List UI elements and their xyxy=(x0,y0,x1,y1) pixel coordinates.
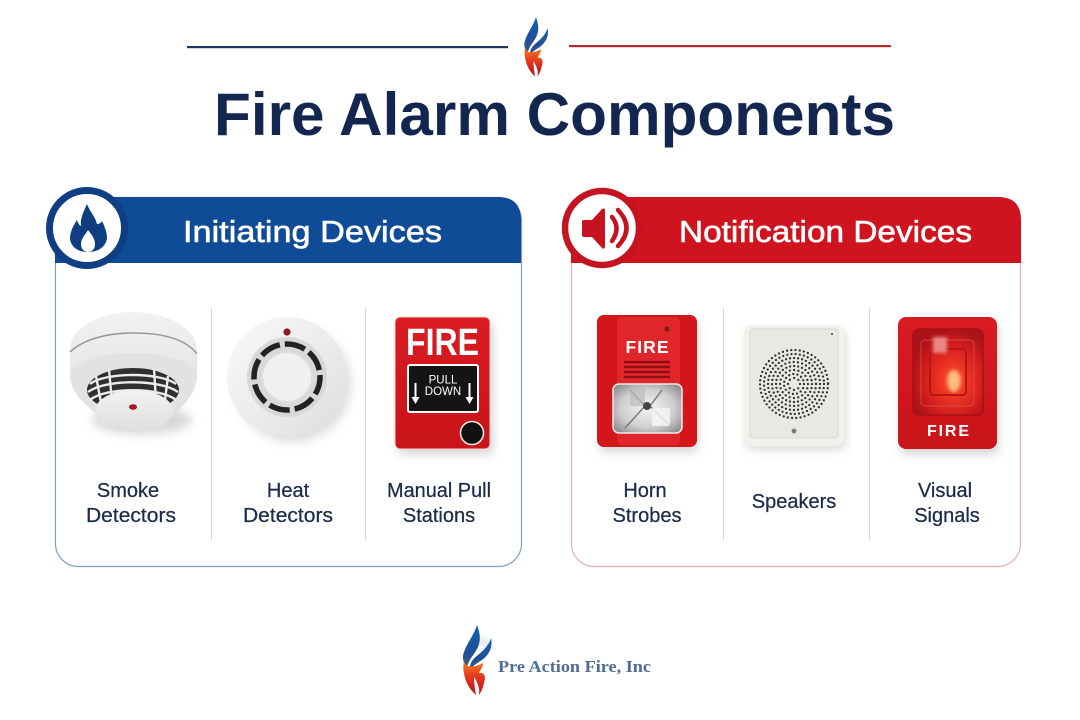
label: horn strobes xyxy=(613,480,681,527)
divider xyxy=(869,308,870,540)
label: manual pull stations: Manual Pull xyxy=(387,480,491,502)
label: manual pull stations: Stations xyxy=(403,505,475,527)
label: heat detectors: Heat xyxy=(267,480,310,502)
footer logo xyxy=(463,615,651,695)
company name: Pre Action Fire, Inc xyxy=(498,657,651,676)
device: horn strobe xyxy=(597,315,697,452)
heading: notification devices: Notification Devices xyxy=(679,214,972,249)
icon: flame badge xyxy=(50,190,124,266)
label: smoke detectors xyxy=(86,480,176,527)
panel header xyxy=(55,197,521,263)
panel: notification devices xyxy=(565,191,1021,566)
device: speaker xyxy=(744,325,845,449)
device: smoke detector xyxy=(70,312,197,434)
icon: speaker badge xyxy=(565,191,639,265)
device: manual pull station xyxy=(395,317,493,454)
label: visual signals: Visual xyxy=(918,480,972,502)
device: horn strobe: FIRE xyxy=(626,337,668,357)
divider xyxy=(365,308,366,540)
icon: footer smoke wisp xyxy=(465,615,494,650)
label: smoke detectors: Smoke xyxy=(97,480,159,502)
device: heat detector xyxy=(227,317,351,442)
device: manual pull station: DOWN xyxy=(425,386,461,398)
divider xyxy=(723,308,724,540)
device: manual pull station: FIRE xyxy=(406,322,479,364)
label: speakers: Speakers xyxy=(752,491,836,513)
device: visual signal xyxy=(898,317,998,454)
label: horn strobes: Horn xyxy=(623,480,667,502)
title: Fire Alarm Components xyxy=(214,81,895,148)
label: horn strobes: Strobes xyxy=(613,505,681,527)
icon: footer flame xyxy=(463,625,492,695)
panel: initiating devices xyxy=(50,190,522,566)
top divider: red line xyxy=(569,45,891,47)
label: visual signals xyxy=(914,480,980,527)
divider xyxy=(211,308,212,540)
panel outline xyxy=(56,198,522,566)
label: smoke detectors: Detectors xyxy=(86,505,176,527)
top divider: blue line xyxy=(187,46,508,48)
label: visual signals: Signals xyxy=(914,505,980,527)
panel outline xyxy=(572,198,1020,566)
heading: initiating devices: Initiating Devices xyxy=(183,214,442,249)
label: heat detectors xyxy=(243,480,333,527)
device: manual pull station: PULL xyxy=(429,374,458,386)
panel header xyxy=(571,197,1021,263)
label: heat detectors: Detectors xyxy=(243,505,333,527)
icon: top flame logo xyxy=(524,17,548,76)
device: visual signal: FIRE xyxy=(927,423,969,440)
label: manual pull stations xyxy=(387,480,491,527)
